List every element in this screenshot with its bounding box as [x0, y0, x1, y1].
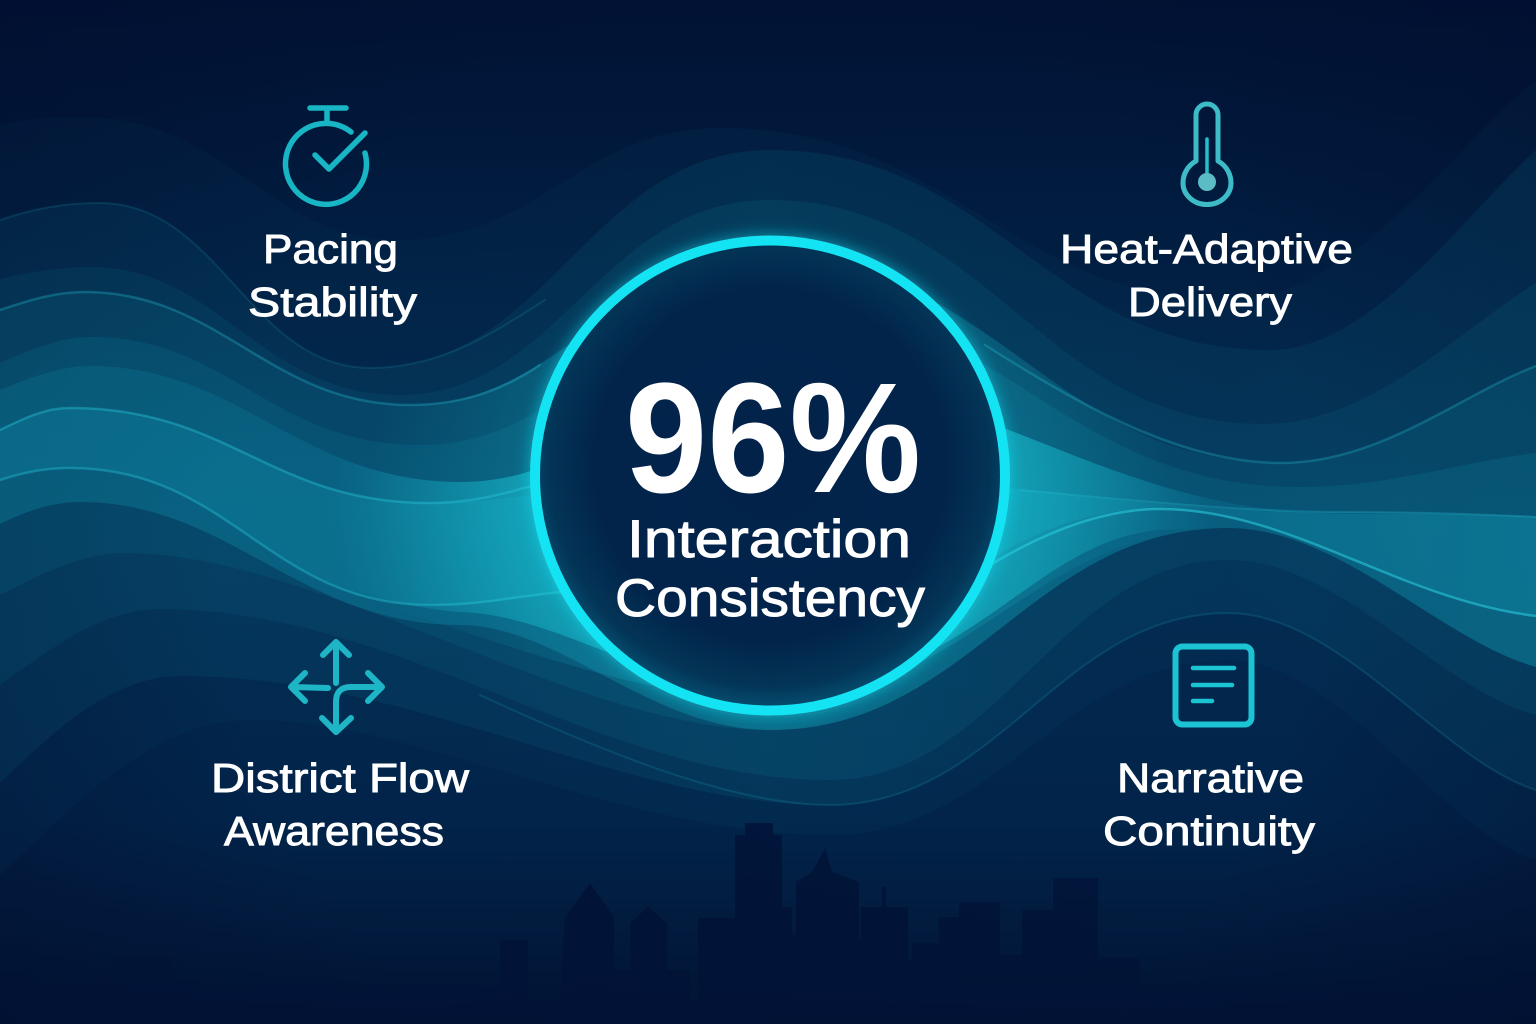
city skyline silhouette — [0, 823, 1536, 1024]
metric label: Interaction — [627, 510, 911, 569]
metric label — [615, 510, 926, 628]
metric value: 96% — [625, 351, 921, 526]
label: Heat-Adaptive Delivery: Delivery — [1128, 279, 1293, 325]
icon: four-way arrows — [291, 642, 382, 732]
icon: stopwatch with check — [285, 108, 366, 204]
label: Narrative Continuity: Narrative — [1117, 755, 1304, 801]
label: Pacing Stability: Pacing — [263, 226, 398, 272]
icon: document with text lines — [1176, 646, 1252, 724]
central metric circle — [535, 240, 1005, 710]
central ring glow — [533, 238, 1007, 712]
label: Narrative Continuity: Continuity — [1103, 808, 1316, 854]
metric label: Consistency — [615, 569, 926, 628]
flowing wave bands — [0, 80, 1536, 875]
label: Narrative Continuity — [1103, 755, 1316, 854]
label: Heat-Adaptive Delivery: Heat-Adaptive — [1060, 226, 1353, 272]
label: Heat-Adaptive Delivery — [1060, 226, 1353, 325]
wave glow outer — [0, 260, 1536, 700]
wave glow inner — [0, 366, 1536, 690]
wave highlight lines — [0, 203, 1536, 805]
label: District Flow Awareness: Awareness — [224, 808, 444, 854]
label: District Flow Awareness — [211, 755, 469, 854]
label: District Flow Awareness: District Flow — [211, 755, 469, 801]
label: Pacing Stability — [248, 226, 418, 325]
label: Pacing Stability: Stability — [248, 279, 418, 325]
icon: thermometer — [1183, 104, 1231, 204]
